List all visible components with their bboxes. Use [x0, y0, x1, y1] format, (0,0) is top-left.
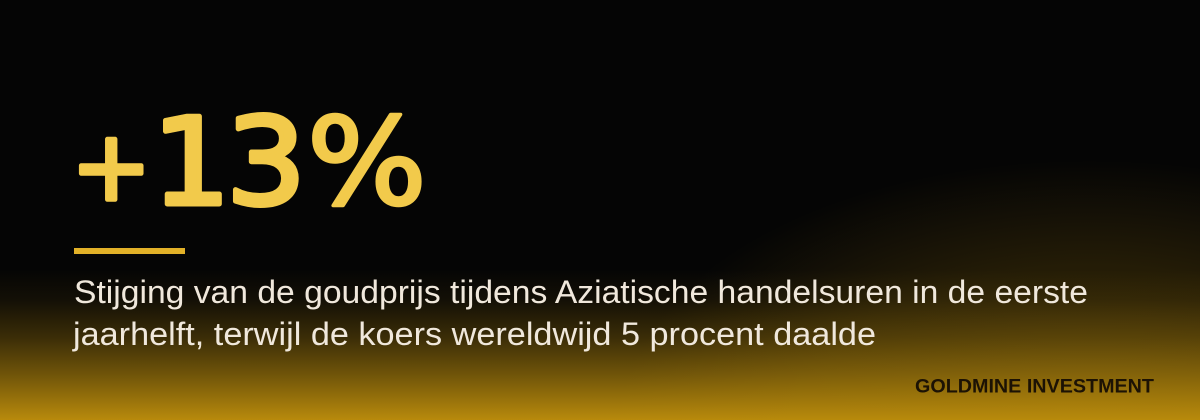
big number: %: [307, 94, 427, 233]
big number: +: [71, 110, 151, 222]
accent line: [74, 248, 185, 254]
big number: 3: [226, 94, 306, 233]
big number: 1: [152, 93, 231, 233]
big number: [71, 93, 427, 233]
description line 2: jaarhelft, terwijl de koers wereldwijd 5 procent daalde: [72, 316, 876, 352]
description line 1: Stijging van de goudprijs tijdens Aziatische handelsuren in de eerste: [74, 274, 1088, 310]
description: [72, 274, 1088, 352]
source label: GOLDMINE INVESTMENT: [915, 376, 1154, 398]
